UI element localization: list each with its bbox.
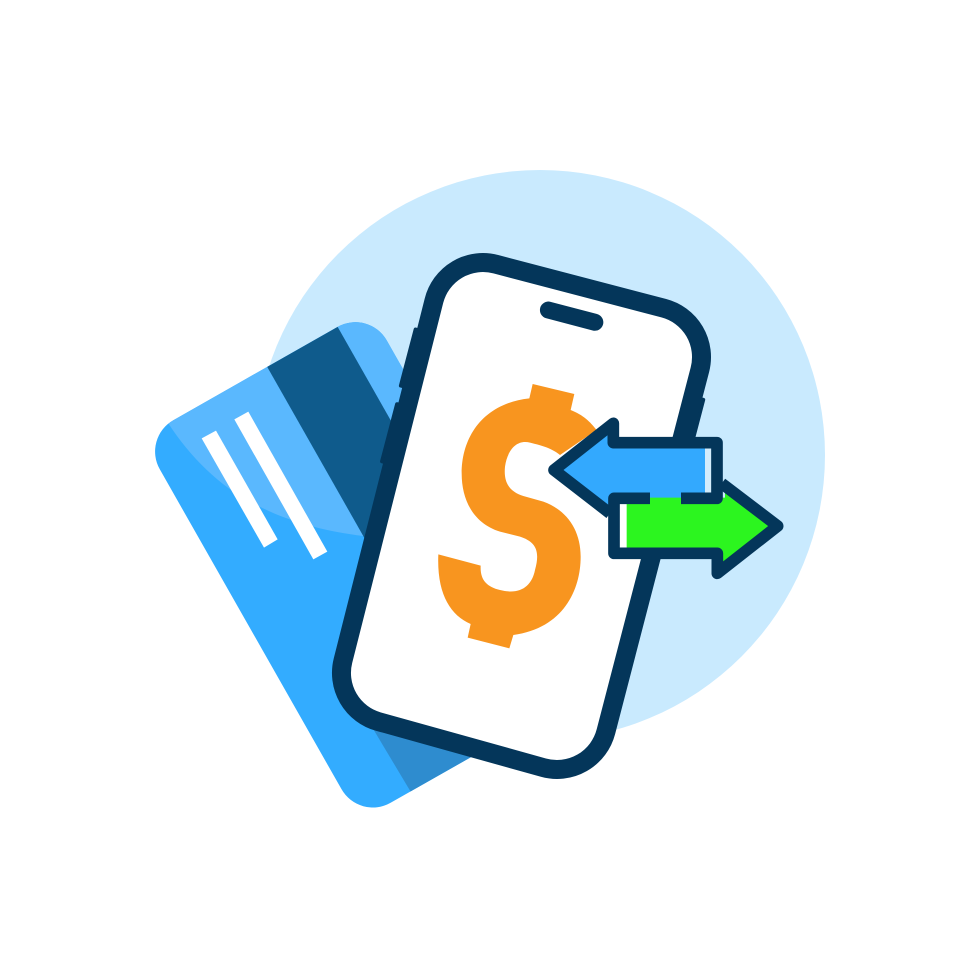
white line right	[234, 412, 327, 559]
credit card	[155, 322, 471, 808]
white line left	[202, 431, 278, 548]
right arrow outline	[614, 483, 778, 573]
exchange arrows	[554, 423, 778, 573]
phone notch	[538, 300, 605, 333]
card lower shadow	[374, 730, 471, 792]
background circle	[255, 170, 825, 740]
card light sheen	[168, 322, 403, 536]
phone body	[341, 263, 702, 769]
left arrow fill	[560, 432, 705, 510]
side buttons	[379, 322, 706, 539]
left arrow light sliver	[705, 448, 712, 493]
left arrow outline	[554, 423, 717, 513]
dollar sign	[438, 384, 597, 648]
illustration: phone payment with credit card	[155, 170, 825, 808]
card magnetic stripe	[267, 327, 391, 538]
card white lines	[202, 412, 327, 559]
smartphone	[341, 263, 706, 769]
card body	[155, 322, 471, 808]
right arrow white sliver	[619, 503, 627, 548]
right arrow fill	[627, 488, 772, 565]
